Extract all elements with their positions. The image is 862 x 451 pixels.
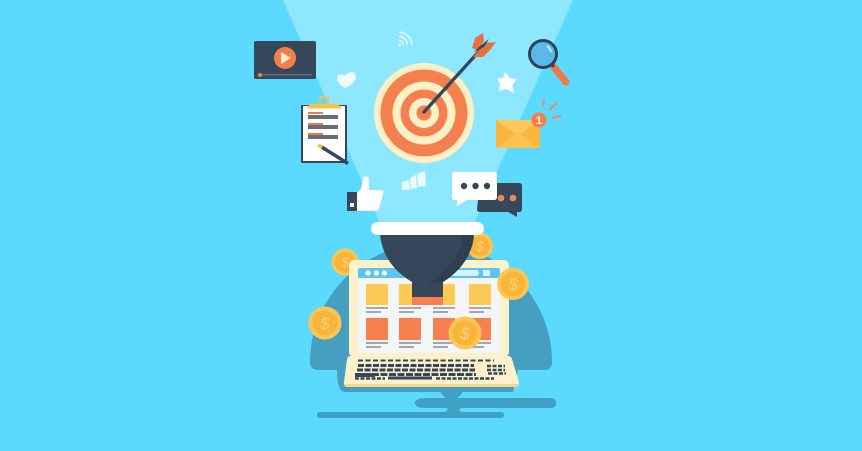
icon: video player bbox=[254, 41, 316, 79]
laptop bbox=[344, 260, 519, 387]
icon: clipboard bbox=[301, 96, 348, 164]
coin: right bbox=[497, 268, 529, 300]
icon: white chat bubble bbox=[452, 172, 497, 206]
coin: lower left: $ bbox=[319, 314, 330, 333]
coin: on screen bbox=[448, 316, 482, 350]
icon: target bbox=[374, 63, 474, 163]
coin: upper right behind funnel bbox=[467, 233, 493, 259]
background dome bbox=[310, 243, 552, 392]
coin: right: $ bbox=[507, 275, 518, 294]
icon: bar chart bbox=[402, 171, 426, 190]
funnel bbox=[371, 222, 484, 305]
laptop keyboard base bbox=[344, 356, 519, 387]
icon: dark chat bubble bbox=[477, 183, 522, 217]
icon: magnifying glass bbox=[530, 40, 566, 82]
icon: heart bbox=[337, 72, 356, 88]
product cards bbox=[366, 284, 491, 348]
icon: arrow bbox=[424, 33, 496, 112]
desk shadows bbox=[317, 390, 556, 418]
icon: envelope with notification bbox=[496, 99, 561, 148]
laptop screen bbox=[349, 260, 509, 357]
icon: envelope with notification: 1 bbox=[536, 115, 542, 127]
coin: lower left bbox=[308, 306, 342, 340]
coin: on screen: $ bbox=[459, 324, 470, 343]
coin: upper right behind funnel: $ bbox=[475, 238, 484, 254]
icon: wifi signal bbox=[399, 32, 412, 46]
icon: star bbox=[497, 72, 517, 93]
coin: upper left: $ bbox=[340, 254, 349, 270]
coin: upper left bbox=[332, 248, 358, 276]
light beam bbox=[283, 0, 573, 226]
icon: thumbs up bbox=[347, 176, 383, 211]
